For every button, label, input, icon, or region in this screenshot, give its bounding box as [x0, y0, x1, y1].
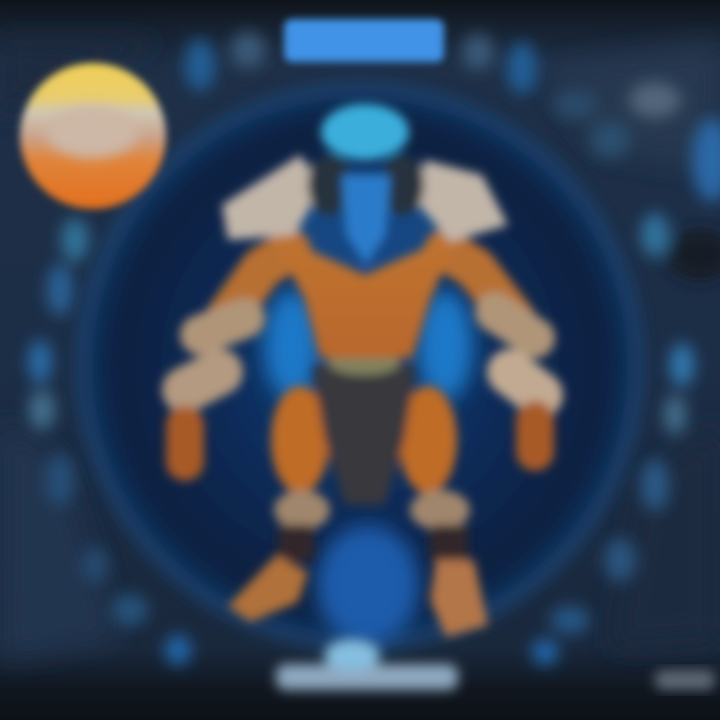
arms — [185, 250, 540, 462]
cyan crest — [321, 104, 409, 160]
torso — [270, 232, 460, 358]
bottom right caption — [655, 670, 715, 690]
feet — [228, 555, 488, 637]
dark helmet sides — [308, 155, 424, 215]
heading pill — [284, 19, 444, 62]
central dark disc — [76, 82, 644, 650]
legs — [271, 386, 470, 561]
blue glow behind figure — [264, 165, 473, 645]
blue face — [342, 175, 390, 265]
figure — [185, 104, 540, 637]
orange badge — [20, 63, 166, 209]
fur shoulders — [222, 155, 508, 242]
badge centre band — [46, 106, 138, 158]
belt — [328, 349, 400, 375]
bottom title — [276, 639, 458, 690]
loincloth — [312, 365, 416, 505]
